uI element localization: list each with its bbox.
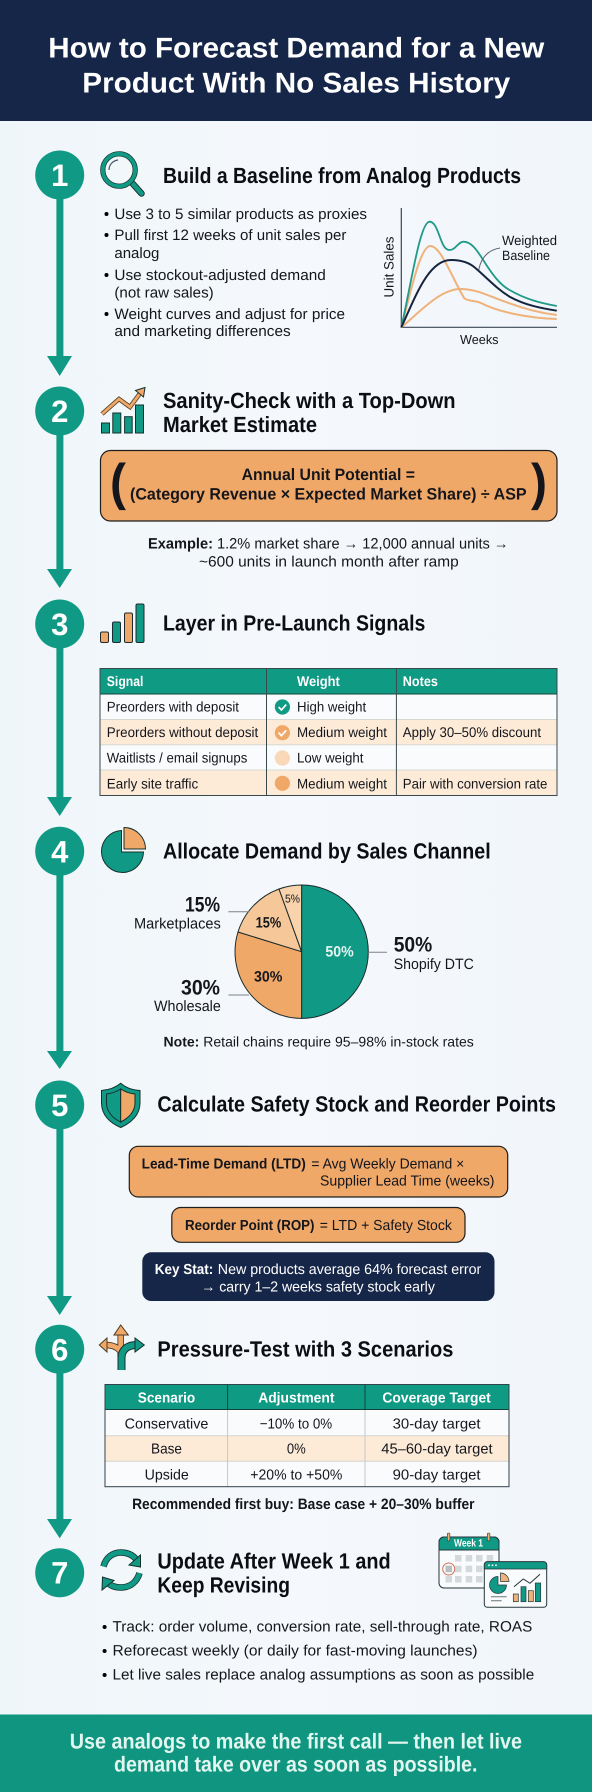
table rows: High weight [297, 699, 366, 715]
heading: Keep Revising [157, 1572, 290, 1597]
heading: Market Estimate [163, 412, 317, 437]
heading: Build a Baseline from Analog Products [163, 163, 521, 188]
table rows: +20% to +50% [250, 1467, 342, 1483]
callout: wholesale: Wholesale [154, 998, 221, 1015]
table rows: 45–60-day target [381, 1442, 493, 1458]
step 1 number and arrow: 1 [51, 158, 68, 193]
example text: Example: 1.2% market share → 12,000 annual units → [148, 535, 508, 552]
step 6 number and arrow: 6 [51, 1332, 68, 1367]
bullet list: Let live sales replace analog assumptions as soon as possible [112, 1667, 534, 1684]
table rows [125, 1416, 493, 1483]
example text: ~600 units in launch month after ramp [199, 554, 459, 571]
step 4 number and arrow [35, 827, 84, 1069]
heading [157, 1548, 391, 1597]
table rows: 30-day target [393, 1416, 481, 1432]
icon: growth chart [102, 388, 145, 433]
note: Note: Retail chains require 95–98% in-stock rates [164, 1034, 474, 1050]
bullet list: Reforecast weekly (or daily for fast-moving launches) [112, 1643, 478, 1660]
callout: marketplaces: 15% [185, 894, 220, 917]
closing message: demand take over as soon as possible. [114, 1753, 478, 1777]
step 4 number and arrow: 4 [51, 834, 69, 869]
callout: shopify dtc [368, 934, 474, 973]
callout: key stat: Key Stat: [155, 1262, 213, 1278]
bullet list [103, 1619, 534, 1684]
step 3 number and arrow: 3 [51, 607, 68, 642]
bullet list [104, 206, 367, 340]
table rows [107, 699, 548, 791]
icon: magnifying glass [103, 154, 142, 194]
line chart: unit sales over weeks: Weeks [460, 332, 499, 347]
bullet list: Pull first 12 weeks of unit sales per [114, 227, 346, 244]
recommendation: Recommended first buy: Base case + 20–30% buffer [132, 1496, 475, 1513]
footer band [0, 1714, 592, 1792]
heading: Allocate Demand by Sales Channel [163, 838, 491, 863]
pie chart: channel allocation [235, 885, 368, 1018]
table rows: 0% [287, 1442, 306, 1458]
bullet list: Use stockout-adjusted demand [114, 267, 326, 284]
formula: lead-time demand: Supplier Lead Time (weeks) [320, 1174, 494, 1190]
table header: Scenario [138, 1391, 195, 1407]
pie chart: channel allocation: 15% [256, 914, 281, 931]
title: How to Forecast Demand for a New [48, 32, 545, 64]
table header: Weight [297, 673, 340, 689]
step 6 number and arrow [35, 1325, 84, 1538]
icon: diverging arrows [99, 1325, 144, 1370]
line chart: unit sales over weeks: Weighted [502, 233, 557, 248]
closing message [70, 1729, 522, 1777]
table rows: Base [151, 1442, 182, 1458]
line chart: unit sales over weeks: Unit Sales [382, 236, 396, 298]
callout: shopify dtc: Shopify DTC [394, 956, 474, 973]
formula box: (Category Revenue × Expected Market Share) ÷ ASP [130, 486, 527, 504]
callout: wholesale [154, 976, 249, 1015]
table rows: Preorders without deposit [107, 724, 258, 740]
closing message: Use analogs to make the first call — then let live [70, 1729, 522, 1753]
formula box [100, 450, 557, 521]
step 3 number and arrow [35, 600, 84, 816]
table rows: Pair with conversion rate [403, 775, 548, 791]
table rows: Waitlists / email signups [107, 750, 247, 766]
panel: step 3 pre-launch signals [35, 600, 557, 816]
icon: calendar and dashboard [439, 1533, 547, 1607]
panel: step 1 build a baseline [35, 150, 557, 376]
formula: lead-time demand [129, 1146, 508, 1197]
calendar: Week 1 [454, 1538, 483, 1550]
formula: reorder point: = LTD + Safety Stock [320, 1218, 453, 1234]
formula box: ) [531, 454, 547, 510]
table header [138, 1391, 491, 1407]
icon: shield [102, 1083, 140, 1128]
heading: Sanity-Check with a Top-Down [163, 388, 456, 413]
step 5 number and arrow: 5 [51, 1088, 68, 1123]
step 5 number and arrow [35, 1080, 84, 1315]
table header: Coverage Target [382, 1391, 491, 1407]
step 7 number [35, 1548, 84, 1597]
step 1 number and arrow [35, 150, 84, 376]
pie chart: channel allocation: 30% [254, 969, 282, 986]
callout: shopify dtc: 50% [394, 934, 432, 957]
icon: signal bars [100, 604, 144, 642]
table rows: Upside [145, 1467, 189, 1483]
header band [0, 0, 592, 121]
bullet list: and marketing differences [114, 323, 291, 340]
formula: reorder point [172, 1208, 465, 1242]
bullet list: Track: order volume, conversion rate, sell-through rate, ROAS [112, 1619, 532, 1636]
table header: Adjustment [258, 1391, 335, 1407]
scenarios table [105, 1384, 509, 1487]
table rows: Low weight [297, 750, 364, 766]
bullet list: (not raw sales) [114, 284, 214, 302]
formula box: Annual Unit Potential = [242, 466, 415, 484]
bullet list: Use 3 to 5 similar products as proxies [114, 206, 367, 223]
signals table [100, 668, 557, 796]
callout: wholesale: 30% [181, 976, 220, 999]
table header [107, 673, 438, 689]
example text [148, 535, 508, 571]
formula box: ( [110, 454, 126, 510]
step 2 number and arrow [35, 386, 84, 588]
table rows: Conservative [125, 1416, 208, 1432]
line chart: unit sales over weeks [382, 208, 557, 347]
panel: step 5 safety stock [35, 1080, 556, 1315]
panel: step 6 scenarios [35, 1325, 509, 1538]
callout: key stat: New products average 64% forecast error [218, 1262, 481, 1278]
table header: Notes [403, 673, 438, 689]
heading: Calculate Safety Stock and Reorder Points [157, 1092, 556, 1117]
panel: step 7 update after week 1 [35, 1533, 547, 1684]
table rows: Medium weight [297, 724, 387, 740]
table rows: −10% to 0% [260, 1416, 332, 1432]
title [48, 32, 545, 100]
bullet list: Weight curves and adjust for price [114, 306, 345, 323]
table rows: Preorders with deposit [107, 699, 239, 715]
callout: marketplaces: Marketplaces [134, 915, 221, 932]
step 7 number: 7 [51, 1556, 68, 1591]
heading [163, 388, 456, 437]
formula: lead-time demand: = Avg Weekly Demand × [311, 1156, 464, 1172]
heading: Update After Week 1 and [157, 1548, 391, 1573]
table rows: Medium weight [297, 775, 387, 791]
heading: Layer in Pre-Launch Signals [163, 611, 425, 636]
callout: key stat [142, 1252, 495, 1301]
table rows: Early site traffic [107, 775, 198, 791]
panel: step 4 channels [35, 827, 491, 1069]
line chart: unit sales over weeks: Baseline [502, 248, 550, 263]
weight indicators [275, 699, 290, 791]
heading: Pressure-Test with 3 Scenarios [157, 1337, 453, 1362]
callout: marketplaces [134, 894, 249, 932]
title: Product With No Sales History [82, 68, 510, 100]
pie chart: channel allocation: 5% [285, 894, 300, 906]
pie chart: channel allocation: 50% [325, 944, 354, 961]
panel: step 2 top-down estimate [35, 386, 557, 588]
icon: pie chart [102, 828, 146, 872]
formula: lead-time demand: Lead-Time Demand (LTD) [142, 1156, 306, 1172]
table header: Signal [107, 673, 143, 689]
table rows: Apply 30–50% discount [403, 724, 541, 740]
bullet list: analog [114, 245, 159, 262]
dashboard [484, 1562, 547, 1607]
step 2 number and arrow: 2 [51, 394, 68, 429]
table rows: 90-day target [393, 1467, 481, 1483]
formula: reorder point: Reorder Point (ROP) [185, 1218, 315, 1234]
icon: refresh arrows [102, 1552, 140, 1590]
callout: key stat: → carry 1–2 weeks safety stock early [201, 1279, 436, 1295]
